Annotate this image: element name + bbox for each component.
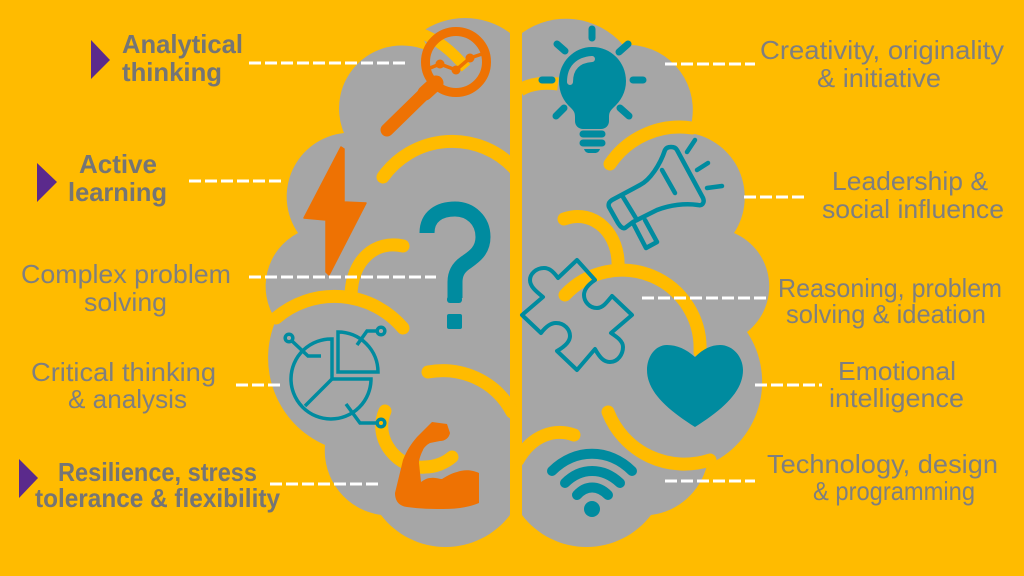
left hemisphere yellow folds — [276, 33, 514, 467]
label: resilience, stress tolerance and flexibility — [35, 457, 280, 513]
right hemisphere yellow folds — [518, 83, 710, 464]
icon: magnifying glass with line chart — [387, 32, 486, 130]
label: reasoning, problem solving and ideation: solving & ideation — [786, 299, 986, 329]
label: critical thinking and analysis — [31, 357, 216, 414]
label: reasoning, problem solving and ideation: Reasoning, problem — [778, 273, 1002, 303]
label: complex problem solving: Complex problem — [21, 259, 231, 289]
label: leadership and social influence: Leadership & — [832, 166, 988, 196]
icon: light bulb — [542, 29, 643, 153]
label: creativity, originality and initiative — [760, 35, 1004, 93]
label: resilience, stress tolerance and flexibility: Resilience, stress — [58, 457, 257, 487]
connector lines — [189, 63, 822, 484]
label: resilience, stress tolerance and flexibility: tolerance & flexibility — [35, 483, 280, 513]
left brain hemisphere — [266, 18, 514, 547]
marker: analytical thinking — [91, 40, 110, 79]
icon: pie chart — [285, 327, 385, 427]
marker: resilience — [19, 459, 38, 498]
icon: lightning bolt — [304, 147, 366, 275]
label: analytical thinking: thinking — [122, 57, 222, 87]
label: analytical thinking: Analytical — [122, 29, 243, 59]
label: active learning: Active — [79, 149, 157, 179]
icon: puzzle piece — [522, 260, 632, 370]
label: complex problem solving — [21, 259, 231, 317]
icon: flexed bicep — [395, 422, 479, 509]
label: technology, design and programming — [767, 449, 998, 506]
label: critical thinking and analysis: Critical thinking — [31, 357, 216, 387]
label: leadership and social influence: social influence — [822, 194, 1004, 224]
label: active learning — [68, 149, 167, 207]
icon: heart — [647, 345, 743, 427]
label: reasoning, problem solving and ideation — [778, 273, 1002, 329]
label: emotional intelligence — [829, 356, 964, 413]
icon: question mark — [427, 209, 483, 329]
icon: megaphone — [609, 140, 722, 248]
label: emotional intelligence: intelligence — [829, 383, 964, 413]
label: emotional intelligence: Emotional — [838, 356, 956, 386]
label: creativity, originality and initiative: Creativity, originality — [760, 35, 1004, 65]
label: creativity, originality and initiative: & initiative — [817, 63, 941, 93]
right brain hemisphere — [518, 19, 769, 547]
marker: active learning — [37, 163, 57, 202]
label: technology, design and programming: Technology, design — [767, 449, 998, 479]
label: technology, design and programming: & programming — [813, 476, 975, 506]
label: complex problem solving: solving — [84, 287, 167, 317]
label: active learning: learning — [68, 177, 167, 207]
icon: wifi signal — [552, 454, 632, 517]
label: analytical thinking — [122, 29, 243, 87]
label: leadership and social influence — [822, 166, 1004, 224]
label: critical thinking and analysis: & analysis — [68, 384, 187, 414]
